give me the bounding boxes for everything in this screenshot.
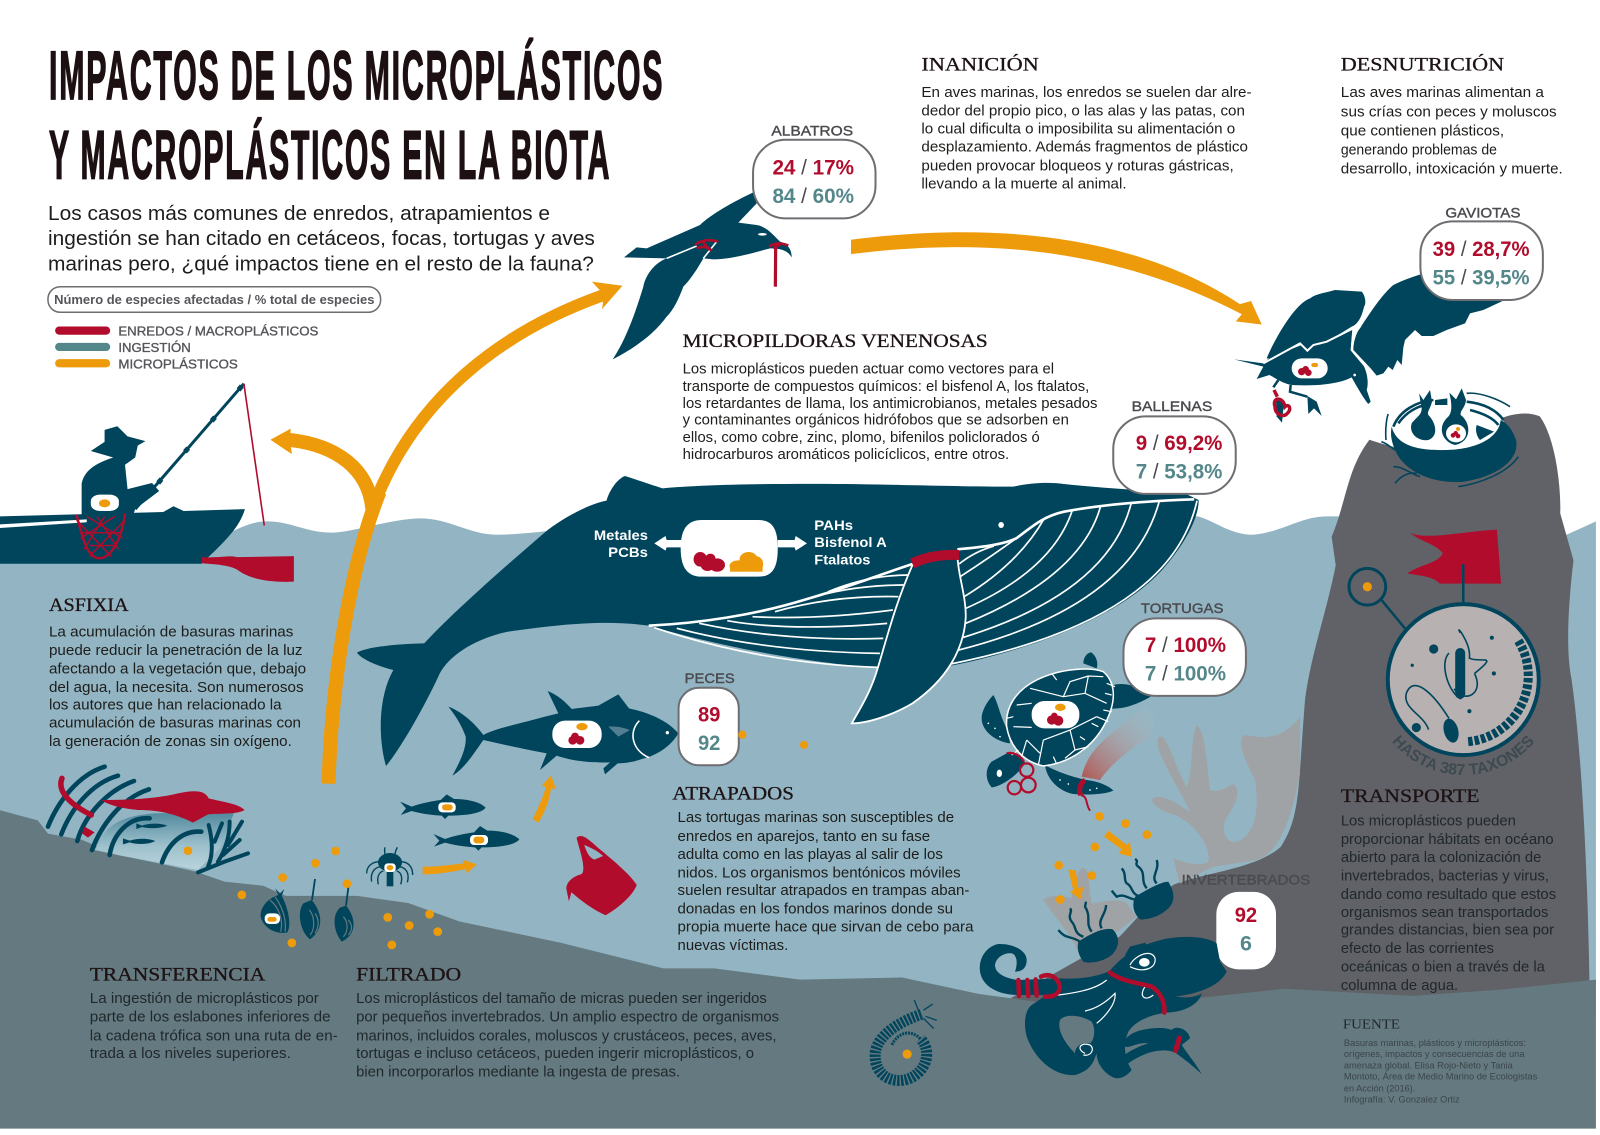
bubble: invertebrados: 6: [1240, 932, 1252, 956]
panel: desnutrición: [1341, 53, 1563, 177]
bubble: ballenas: [1113, 399, 1236, 494]
icon: fisherman in boat: [0, 384, 264, 564]
panel: micropíldoras venenosas: hidrocarburos aromáticos policíclicos, entre otros.: [683, 447, 1009, 463]
bubble: peces: PECES: [685, 671, 735, 687]
subtitle: [48, 203, 595, 275]
panel: filtrado: tortugas e incluso cetáceos, pueden ingerir microplásticos, o: [356, 1046, 754, 1062]
icon: microorganism lens: [1348, 564, 1541, 775]
whale: [357, 476, 1199, 766]
source: en Acción (2016).: [1344, 1083, 1415, 1094]
small fish in bones: [123, 823, 167, 844]
panel: asfixia: los autores que han relacionado la: [49, 698, 282, 714]
panel: asfixia: La acumulación de basuras marinas: [49, 625, 293, 641]
small orange arrow to tuna: [533, 776, 556, 822]
panel: asfixia: ASFIXIA: [49, 595, 129, 616]
panel: atrapados: ATRAPADOS: [672, 784, 794, 805]
rock: [1009, 414, 1590, 1005]
panel: filtrado: por pequeños invertebrados. Un amplio espectro de organismos: [356, 1009, 779, 1025]
whale labels: PCBs: [608, 545, 648, 561]
panel: transporte: Los microplásticos pueden: [1341, 814, 1516, 830]
panel: transporte: abierto para la colonización de: [1341, 850, 1541, 866]
panel: filtrado: bien incorporarlos mediante la ingesta de presas.: [356, 1065, 680, 1081]
bubble: invertebrados: [1182, 872, 1310, 969]
entanglement band: [910, 550, 959, 568]
panel: transporte: TRANSPORTE: [1341, 786, 1480, 807]
arrow: food chain to albatross: [329, 282, 622, 784]
legend: [55, 324, 319, 371]
panel: transferencia: la cadena trófica son una ruta de en-: [90, 1028, 338, 1044]
net: [77, 514, 125, 558]
legend pill: Número de especies afectadas / % total de especies: [54, 292, 374, 307]
ground: [0, 810, 1596, 1129]
panel: atrapados: donadas en los fondos marinos donde su: [678, 901, 953, 917]
bubble: tortugas: TORTUGAS: [1141, 601, 1223, 617]
panel: asfixia: del agua, la necesita. Son numerosos: [49, 680, 304, 696]
panel: micropíldoras venenosas: y contaminantes orgánicos hidrófobos que se adsorben en: [683, 412, 1069, 428]
filter feeders and small fish: [261, 794, 519, 942]
tuna: [448, 691, 678, 776]
icon: microorganism lens: HASTA 387 TAXONES: [1392, 735, 1534, 775]
panel: micropíldoras venenosas: Los microplásticos pueden actuar como vectores para el: [683, 361, 1054, 377]
panel: micropíldoras venenosas: MICROPILDORAS VENENOSAS: [683, 331, 988, 352]
panel: inanición: En aves marinas, los enredos se suelen dar alre-: [921, 85, 1252, 101]
gull: [1234, 274, 1503, 423]
title: [49, 38, 664, 194]
microplastic dots: [237, 731, 1151, 949]
panel: transporte: columna de agua.: [1341, 978, 1458, 994]
panel: transporte: invertebrados, bacterias y virus,: [1341, 869, 1549, 885]
bubble: albatros: ALBATROS: [771, 124, 853, 140]
whale labels: PAHs: [814, 518, 853, 534]
bag on rock: [1407, 530, 1501, 584]
source: amenaza global. Elisa Rojo-Nieto y Tania: [1344, 1060, 1513, 1071]
bubble: albatros: 24 / 17%: [772, 155, 854, 179]
source: orígenes, impactos y consecuencias de una: [1344, 1049, 1525, 1060]
bubble: ballenas: BALLENAS: [1132, 399, 1212, 415]
panel: transporte: efecto de las corrientes: [1341, 941, 1494, 957]
panel: asfixia: la generación de zonas sin oxígeno.: [49, 734, 292, 750]
panel: atrapados: propia muerte hace que sirvan de cebo para: [678, 920, 974, 936]
panel: inanición: dedor del propio pico, o las alas y las patas, con: [921, 103, 1245, 119]
panel: desnutrición: Las aves marinas alimentan a: [1341, 85, 1545, 101]
bubble: tortugas: 7 / 100%: [1145, 662, 1226, 686]
whale skeleton with seaweed: [48, 767, 248, 872]
panel: inanición: llevando a la muerte al animal.: [921, 176, 1127, 192]
source: Montoto, Área de Medio Marino de Ecologistas: [1344, 1072, 1537, 1083]
bubble: tortugas: 7 / 100%: [1145, 633, 1226, 657]
bubble: gaviotas: [1420, 205, 1543, 300]
panel: filtrado: [356, 964, 779, 1081]
bubble: gaviotas: 55 / 39,5%: [1433, 266, 1530, 290]
subtitle: marinas pero, ¿qué impactos tiene en el resto de la fauna?: [48, 253, 594, 275]
panel: transporte: [1341, 786, 1556, 994]
arrow: food chain to humans: [270, 429, 372, 510]
nest with chicks: [1381, 388, 1518, 487]
bubble: albatros: 84 / 60%: [772, 184, 854, 208]
panel: filtrado: Los microplásticos del tamaño de micras pueden ser ingeridos: [356, 991, 767, 1007]
red bag on seabed: [566, 836, 637, 915]
panel: asfixia: afectando a la vegetación que, debajo: [49, 661, 306, 677]
whale labels: Ftalatos: [814, 552, 870, 568]
shrimp: [367, 847, 413, 886]
bubble: invertebrados: 92: [1235, 903, 1257, 927]
bubble: peces: 92: [698, 731, 720, 755]
bubble: peces: 89: [698, 702, 720, 726]
bubble: albatros: [753, 124, 876, 218]
panel: desnutrición: generando problemas de: [1341, 143, 1497, 159]
panel: micropíldoras venenosas: [683, 331, 1097, 463]
panel: asfixia: acumulación de basuras marinas con: [49, 716, 301, 732]
panel: asfixia: [49, 595, 306, 750]
panel: transferencia: TRANSFERENCIA: [90, 964, 265, 985]
panel: desnutrición: sus crías con peces y moluscos: [1341, 104, 1557, 120]
panel: inanición: lo cual dificulta o imposibilita su alimentación o: [921, 122, 1235, 138]
text: Y MACROPLÁSTICOS EN LA BIOTA: [49, 118, 611, 194]
whale labels: [594, 518, 887, 568]
text: IMPACTOS DE LOS MICROPLÁSTICOS: [49, 38, 664, 114]
panel: transporte: dando como resultado que estos: [1341, 887, 1556, 903]
panel: transferencia: La ingestión de microplásticos por: [90, 991, 319, 1007]
panel: atrapados: enredos en aparejos, tanto en su fase: [678, 829, 930, 845]
legend: MICROPLÁSTICOS: [118, 356, 238, 371]
bubble: ballenas: 9 / 69,2%: [1136, 431, 1222, 455]
turtle: [982, 653, 1155, 811]
legend: INGESTIÓN: [118, 340, 191, 355]
whale labels: Metales: [594, 528, 648, 544]
panel: desnutrición: desarrollo, intoxicación y muerte.: [1341, 161, 1563, 177]
bubble: tortugas: [1123, 601, 1246, 696]
mussels: [261, 879, 354, 942]
anemones and orange arrows: [1058, 831, 1173, 963]
albatross: [613, 192, 792, 359]
octopus: [980, 937, 1227, 1078]
panel: inanición: desplazamiento. Además fragmentos de plástico: [921, 140, 1248, 156]
flipper: [852, 553, 966, 723]
bubble: peces: [679, 671, 739, 765]
panel: atrapados: [672, 784, 974, 954]
subtitle: Los casos más comunes de enredos, atrapamientos e: [48, 203, 550, 225]
panel: filtrado: marinos, incluidos corales, moluscos y crustáceos, peces, aves,: [356, 1028, 777, 1044]
ventral grooves: [649, 499, 1197, 667]
arrow: albatross to gull: [851, 232, 1262, 324]
panel: transporte: oceánicas o bien a través de la: [1341, 959, 1546, 975]
sardines: [400, 794, 519, 851]
panel: atrapados: Las tortugas marinas son susceptibles de: [678, 810, 954, 826]
panel: inanición: pueden provocar bloqueos y roturas gástricas,: [921, 158, 1234, 174]
coral: [1043, 717, 1300, 957]
icon: floating red plastic: [202, 556, 294, 582]
panel: transporte: grandes distancias, bien sea por: [1341, 923, 1554, 939]
source: Basuras marinas, plásticos y microplásticos:: [1344, 1038, 1526, 1049]
panel: transferencia: parte de los eslabones inferiores de: [90, 1009, 331, 1025]
panel: filtrado: FILTRADO: [356, 964, 461, 985]
panel: micropíldoras venenosas: ellos, como cobre, zinc, plomo, bifenilos policlorados ó: [683, 430, 1040, 446]
small orange arrow: [423, 860, 477, 874]
panel: atrapados: nuevas víctimas.: [678, 938, 788, 954]
legend: ENREDOS / MACROPLÁSTICOS: [118, 324, 319, 339]
bubble: ballenas: 7 / 53,8%: [1136, 460, 1222, 484]
stomach pill: [681, 520, 778, 577]
panel: atrapados: nidos. Los organismos bentónicos móviles: [678, 866, 961, 882]
panel: inanición: [921, 53, 1252, 192]
water: [0, 516, 1596, 1020]
panel: micropíldoras venenosas: transporte de compuestos químicos: el bisfenol A, los ftalatos,: [683, 379, 1089, 395]
source: Infografía: V. Gonzalez Ortiz: [1344, 1095, 1460, 1106]
source: [1343, 1017, 1537, 1106]
legend pill: [48, 287, 381, 312]
whale labels: Bisfenol A: [814, 535, 887, 551]
source: FUENTE: [1343, 1017, 1400, 1032]
eye: [998, 522, 1004, 528]
worm: [875, 1000, 937, 1080]
panel: transferencia: [90, 964, 338, 1062]
subtitle: ingestión se han citado en cetáceos, focas, tortugas y aves: [48, 228, 595, 250]
panel: asfixia: puede reducir la penetración de la luz: [49, 643, 303, 659]
panel: transferencia: trada a los niveles superiores.: [90, 1046, 291, 1062]
panel: transporte: organismos sean transportados: [1341, 905, 1548, 921]
plastic sheet on bones: [61, 778, 245, 838]
panel: inanición: INANICIÓN: [921, 53, 1039, 75]
bubble: gaviotas: 39 / 28,7%: [1433, 237, 1530, 261]
panel: desnutrición: que contienen plásticos,: [1341, 123, 1504, 139]
bubble: invertebrados: INVERTEBRADOS: [1182, 872, 1310, 888]
bottom white strip: [0, 1130, 1600, 1135]
panel: atrapados: adulta como en las playas al salir de los: [678, 847, 943, 863]
chemical arrows: [654, 536, 807, 551]
panel: transporte: proporcionar hábitats en océano: [1341, 832, 1554, 848]
panel: atrapados: suelen resultar atrapados en trampas aban-: [678, 883, 969, 899]
bubble: gaviotas: GAVIOTAS: [1445, 205, 1520, 221]
panel: micropíldoras venenosas: los retardantes de llama, los antimicrobianos, metales pesados: [683, 396, 1097, 412]
panel: desnutrición: DESNUTRICIÓN: [1341, 53, 1504, 75]
